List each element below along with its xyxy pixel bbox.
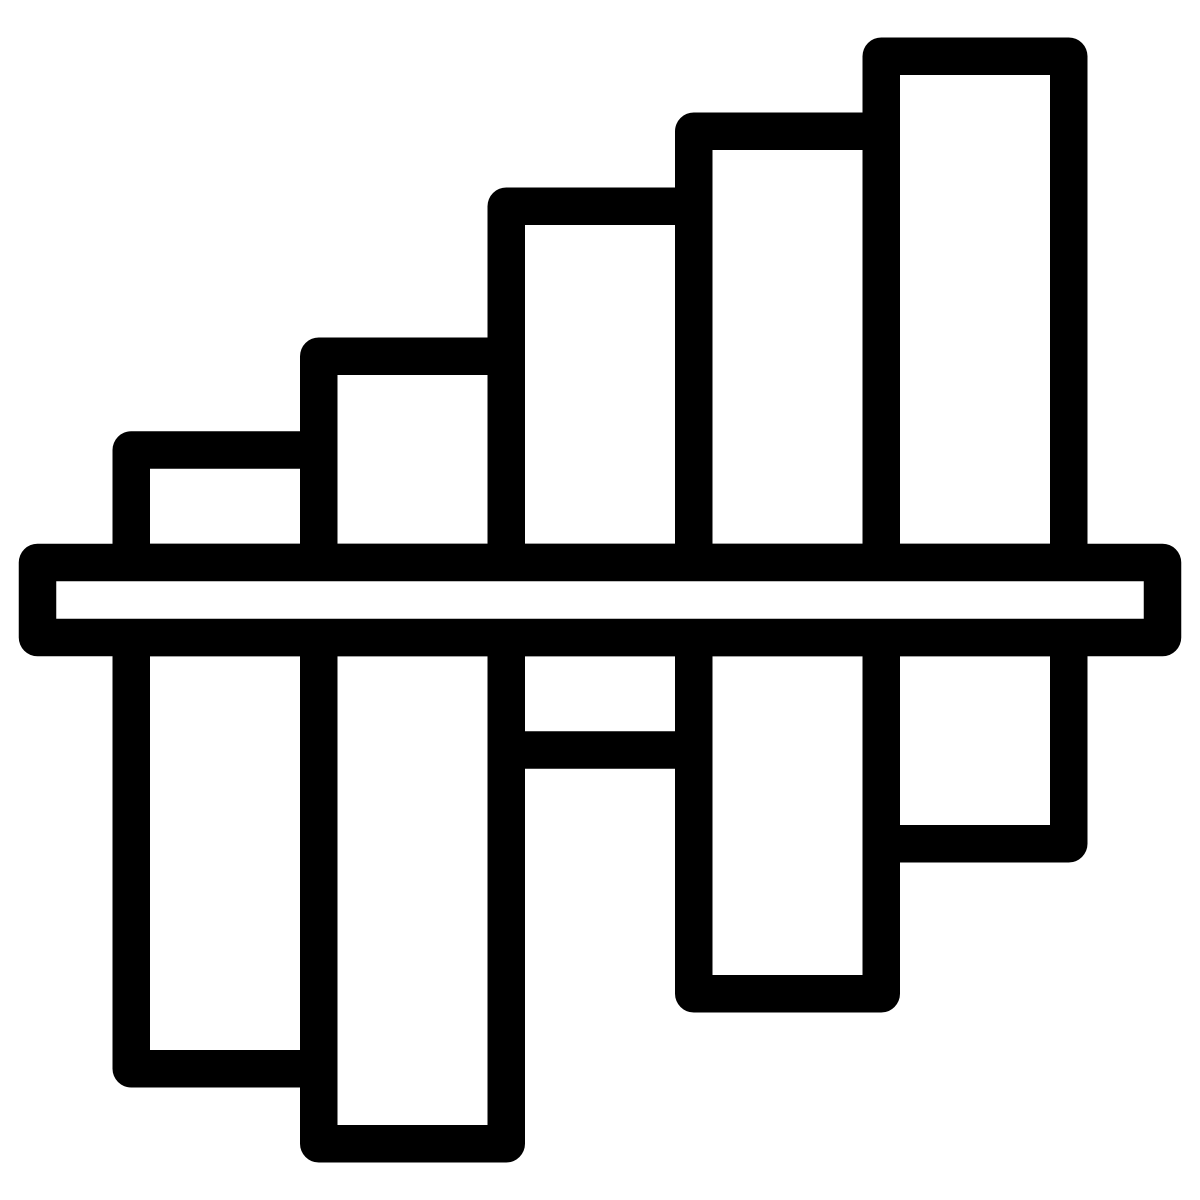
lower bar 3: [506, 638, 694, 750]
upper bar 3: [506, 206, 694, 562]
lower bar 4: [694, 638, 881, 994]
lower bars: [131, 638, 1069, 1144]
upper bar 4: [694, 131, 881, 562]
upper bar 2: [319, 356, 506, 562]
lower bar 5: [881, 638, 1069, 844]
horizontal axis bar: [38, 562, 1162, 638]
upper bars: [131, 56, 1069, 562]
upper bar 1: [131, 450, 319, 562]
lower bar 1: [131, 638, 319, 1069]
upper bar 5: [881, 56, 1069, 562]
lower bar 2: [319, 638, 506, 1144]
